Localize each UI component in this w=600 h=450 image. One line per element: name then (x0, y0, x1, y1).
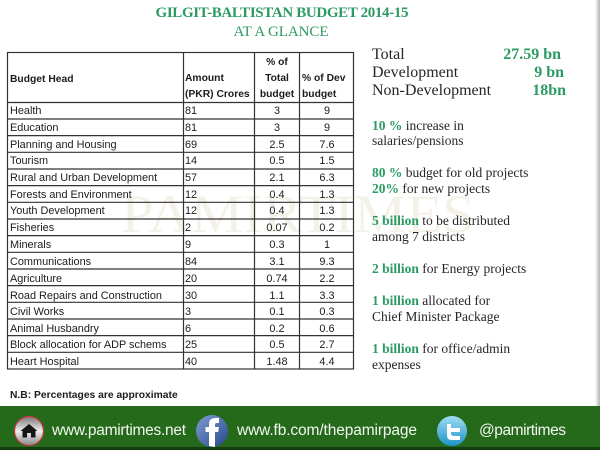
table rows: 0.07 (266, 222, 288, 234)
fact: old projects: 80 % budget for old projects (372, 165, 528, 180)
title: AT A GLANCE (234, 24, 328, 40)
table rows: Education (10, 122, 58, 134)
table header: budget (302, 89, 337, 100)
table rows: Block allocation for ADP schems (10, 339, 167, 351)
table rows: Rural and Urban Development (10, 172, 157, 184)
icon: facebook (196, 415, 228, 447)
watermark: PAMIRTIMES (121, 184, 475, 244)
facebook address: www.fb.com/thepamirpage (236, 422, 417, 439)
table rows: Communications (10, 256, 92, 268)
table header: % of Dev (302, 73, 346, 84)
table rows: 30 (185, 290, 197, 302)
table header: Budget Head (10, 74, 74, 85)
table rows: 0.5 (269, 155, 285, 167)
table rows: 3 (274, 105, 280, 117)
table rows: 1.5 (319, 155, 335, 167)
footnote: N.B: Percentages are approximate (10, 390, 178, 401)
budget totals: Total (372, 46, 405, 63)
table rows: 0.3 (319, 306, 335, 318)
budget totals (372, 46, 566, 99)
fact: new projects: 20% for new projects (372, 181, 490, 196)
table rows: 3 (274, 122, 280, 134)
table rows: Health (10, 105, 41, 117)
fact: districts: 5 billion to be distributed (372, 213, 510, 228)
table rows: 4.4 (319, 356, 335, 368)
title: GILGIT-BALTISTAN BUDGET 2014-15 (156, 5, 408, 21)
table rows: Planning and Housing (10, 139, 117, 151)
table rows: Forests and Environment (10, 189, 132, 201)
table header: (PKR) Crores (185, 89, 250, 100)
table rows: Tourism (10, 155, 48, 167)
table rows: Fisheries (10, 222, 55, 234)
table rows: 3.3 (319, 290, 335, 302)
fact: districts second line: among 7 districts (372, 229, 465, 244)
table rows: 69 (185, 139, 197, 151)
table rows: 0.4 (269, 189, 285, 201)
table rows: Minerals (10, 239, 52, 251)
table rows: 84 (185, 256, 197, 268)
table grid (8, 52, 354, 369)
table rows: 1.3 (319, 205, 335, 217)
fact: office: 1 billion for office/admin (372, 341, 510, 356)
table rows: 40 (185, 356, 197, 368)
fact: salaries: 10 % increase in (372, 118, 464, 133)
table rows: 0.4 (269, 205, 285, 217)
table rows: 7.6 (319, 139, 335, 151)
budget totals: 18bn (532, 82, 566, 99)
table rows: 0.3 (269, 239, 285, 251)
table rows: 25 (185, 339, 197, 351)
table rows: 9 (324, 122, 330, 134)
table rows: 12 (185, 189, 197, 201)
budget totals: 9 bn (534, 64, 564, 81)
table header: % of (266, 57, 288, 68)
table rows: 1 (324, 239, 330, 251)
table rows: Civil Works (10, 306, 65, 318)
fact: chief minister: 1 billion allocated for (372, 293, 491, 308)
table rows: 2.7 (319, 339, 335, 351)
table rows: 81 (185, 105, 197, 117)
table rows: 9 (185, 239, 191, 251)
table rows: 9 (324, 105, 330, 117)
table rows: 2.5 (269, 139, 285, 151)
icon: home (14, 416, 44, 446)
table rows: 2 (185, 222, 191, 234)
table rows: 2.2 (319, 273, 335, 285)
table rows: 0.2 (269, 323, 285, 335)
table header (10, 57, 346, 100)
table rows: 0.2 (319, 222, 335, 234)
table rows: 0.6 (319, 323, 335, 335)
table rows: 14 (185, 155, 197, 167)
icon: twitter (437, 416, 467, 446)
table rows (10, 105, 335, 368)
table rows: 3 (185, 306, 191, 318)
budget totals: Non-Development (372, 82, 492, 99)
table rows: 12 (185, 205, 197, 217)
budget totals: 27.59 bn (503, 46, 561, 63)
table rows: 20 (185, 273, 197, 285)
table rows: 0.5 (269, 339, 285, 351)
table rows: 6 (185, 323, 191, 335)
table rows: 3.1 (269, 256, 285, 268)
table rows: Agriculture (10, 273, 62, 285)
fact: salaries second line: salaries/pensions (372, 133, 463, 148)
twitter handle: @pamirtimes (479, 422, 566, 439)
table header: Total (265, 73, 289, 84)
table rows: Youth Development (10, 205, 105, 217)
fact: energy: 2 billion for Energy projects (372, 261, 526, 276)
table rows: 0.1 (269, 306, 285, 318)
table rows: 0.74 (266, 273, 288, 285)
table rows: Heart Hospital (10, 356, 79, 368)
table rows: 57 (185, 172, 197, 184)
fact: chief minister second line: Chief Minister Package (372, 309, 499, 324)
table rows: 6.3 (319, 172, 335, 184)
footer bar (0, 406, 600, 450)
table rows: Animal Husbandry (10, 323, 100, 335)
table rows: 2.1 (269, 172, 285, 184)
table header: budget (260, 89, 295, 100)
table rows: 9.3 (319, 256, 335, 268)
table rows: 1.1 (269, 290, 285, 302)
budget table (8, 52, 354, 369)
fact: office second line: expenses (372, 357, 421, 372)
table rows: 81 (185, 122, 197, 134)
budget totals: Development (372, 64, 459, 81)
table rows: 1.48 (266, 356, 288, 368)
table rows: 1.3 (319, 189, 335, 201)
table header: Amount (185, 73, 224, 84)
table rows: Road Repairs and Construction (10, 290, 162, 302)
title (156, 5, 408, 40)
website: www.pamirtimes.net (51, 422, 187, 439)
